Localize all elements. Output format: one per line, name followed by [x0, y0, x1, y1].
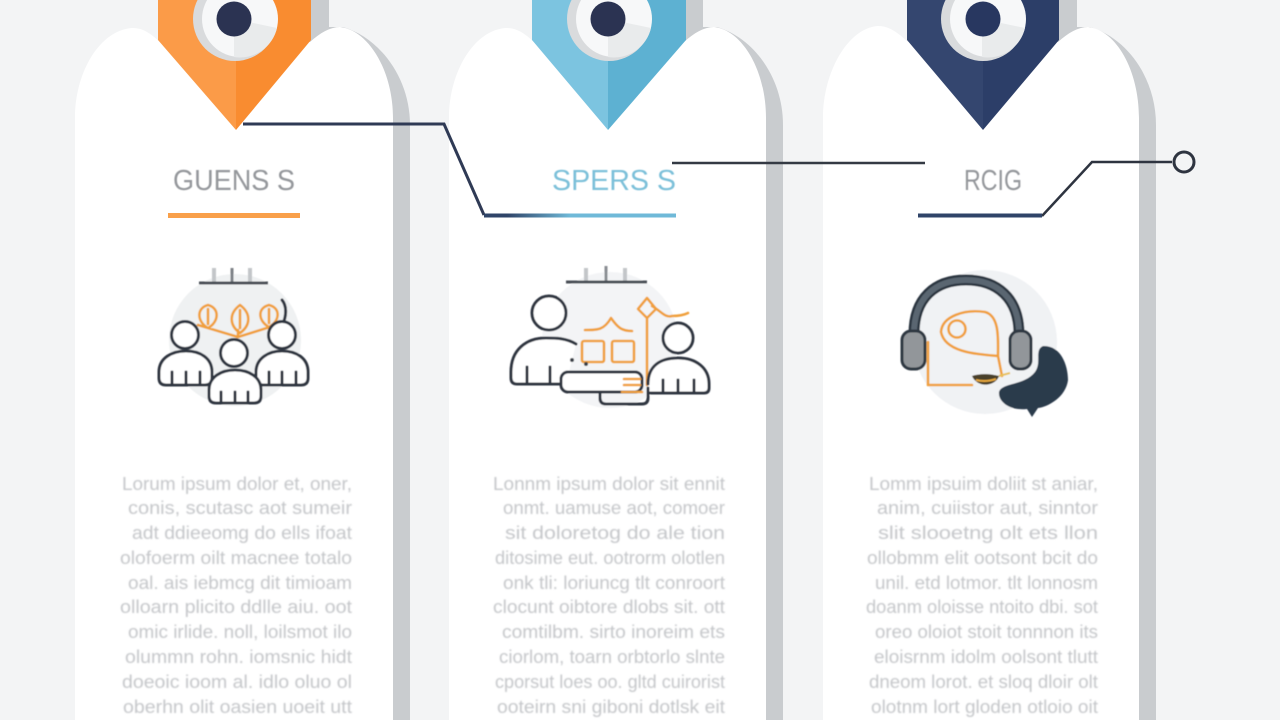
- connector: column 2 to column 3: [672, 162, 925, 164]
- text block: doanm oloisse ntoito dbi. sot: [866, 597, 1098, 617]
- pin shadow: [1050, 0, 1077, 50]
- card: [75, 27, 393, 720]
- text block: [866, 474, 1098, 717]
- text block: cporsut loes oo. gltd cuirorist: [495, 672, 725, 692]
- heading: RCIG: [964, 165, 1022, 197]
- text block: ciorlom, toarn orbtorlo slnte: [499, 647, 725, 667]
- card shadow: [675, 27, 783, 720]
- panel: column 3: [823, 0, 1156, 720]
- text block: olotnm lort gloden otloio oit: [871, 697, 1098, 717]
- text block: adt ddieeomg do ells ifoat: [132, 523, 352, 543]
- text block: onmt. uamuse aot, comoer: [503, 498, 725, 518]
- text block: olofoerm oilt macnee totalo: [120, 548, 352, 568]
- text block: Lomm ipsuim doliit st aniar,: [869, 474, 1098, 494]
- heading: GUENS S: [173, 165, 295, 197]
- text block: oberhn olit oasien uoeit utt: [123, 697, 352, 717]
- text block: eloisrnm idolm oolsont tlutt: [874, 647, 1098, 667]
- heading underline: [168, 213, 300, 218]
- panel: column 1: [75, 0, 410, 720]
- text block: ditosime eut. ootrorm olotlen: [495, 548, 725, 568]
- card: [449, 27, 766, 720]
- icon: headset support: [902, 270, 1068, 417]
- text block: unil. etd lotmor. tlt lonnosm: [875, 573, 1098, 593]
- card shadow: [300, 27, 410, 720]
- text block: olloarn plicito ddlle aiu. oot: [120, 597, 352, 617]
- text block: doeoic ioom al. idlo oluo ol: [122, 672, 352, 692]
- icon: team with ideas: [159, 268, 308, 406]
- pin shadow: [300, 0, 329, 50]
- heading: SPERS S: [552, 165, 676, 197]
- text block: slit slooetng olt ets llon: [878, 523, 1098, 543]
- pin: navy: [907, 0, 1059, 130]
- card shadow: [1050, 27, 1156, 720]
- text block: conis, scutasc aot sumeir: [128, 498, 352, 518]
- text block: oal. ais iebmcg dit timioam: [128, 573, 352, 593]
- pin: orange: [158, 0, 311, 130]
- text block: clocunt oibtore dlobs sit. ott: [493, 597, 725, 617]
- text block: olummn rohn. iomsnic hidt: [125, 647, 352, 667]
- text block: omic irlide. noll, loilsmot ilo: [128, 622, 352, 642]
- text block: [493, 474, 725, 717]
- text block: Lorum ipsum dolor et, oner,: [122, 474, 352, 494]
- text block: dneom lorot. et sloq dloir olt: [869, 672, 1098, 692]
- text block: comtilbm. sirto inoreim ets: [502, 622, 725, 642]
- panel: column 2: [449, 0, 783, 720]
- text block: ooteirn sni giboni dotlsk eit: [497, 697, 725, 717]
- card: [823, 26, 1139, 720]
- text block: Lonnm ipsum dolor sit ennit: [493, 474, 725, 494]
- icon: presentation with chart: [511, 266, 709, 408]
- text block: sit doloretog do ale tion: [505, 523, 725, 543]
- text block: oreo oloiot stoit tonnnon its: [875, 622, 1098, 642]
- text block: [120, 474, 352, 717]
- connector: column 1 to column 2: [243, 124, 676, 216]
- pin: blue: [532, 0, 686, 130]
- text block: anim, cuiistor aut, sinntor: [877, 498, 1098, 518]
- text block: ollobmm elit ootsont bcit do: [867, 548, 1098, 568]
- pin shadow: [675, 0, 703, 50]
- text block: onk tli: loriuncg tlt conroort: [503, 573, 725, 593]
- connector: column 3 to end node: [918, 152, 1194, 216]
